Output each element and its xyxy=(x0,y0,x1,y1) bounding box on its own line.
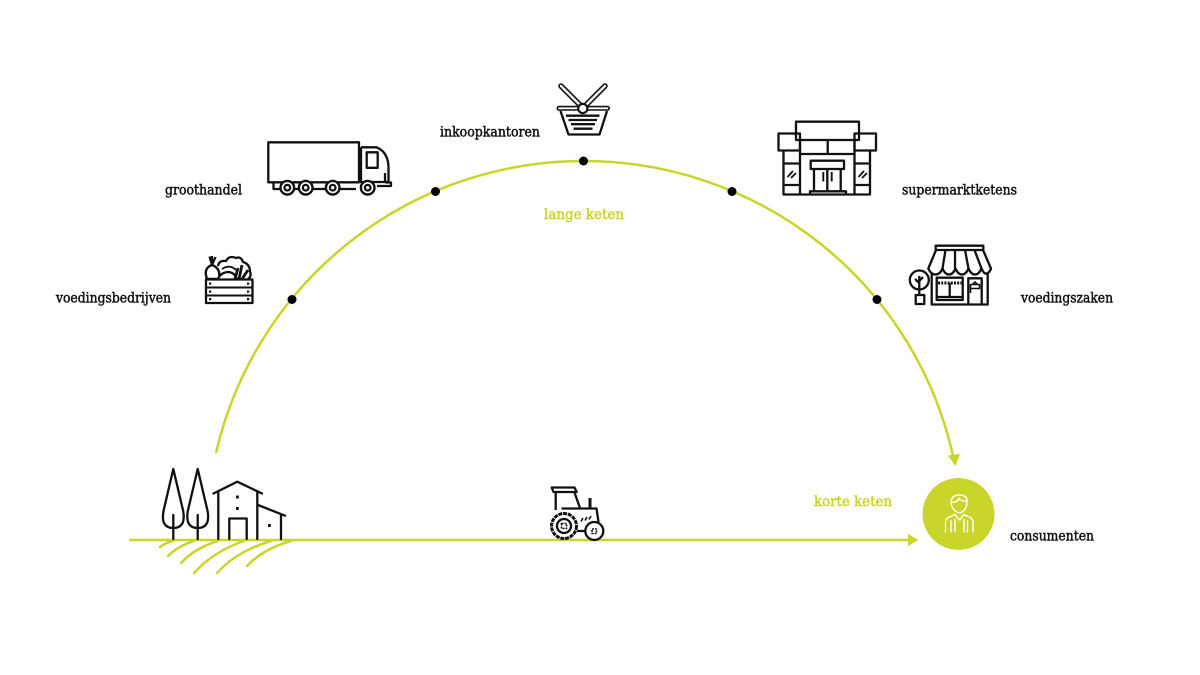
label: groothandel: groothandel xyxy=(165,182,242,198)
label: inkoopkantoren: inkoopkantoren xyxy=(440,124,540,140)
icon: shopping basket xyxy=(559,86,608,134)
icon: supermarket building xyxy=(778,122,876,194)
long chain arc arrow xyxy=(216,161,960,466)
label: lange keten: lange keten xyxy=(544,207,624,223)
label: voedingsbedrijven: voedingsbedrijven xyxy=(55,290,171,306)
label: voedingszaken: voedingszaken xyxy=(1020,290,1113,306)
field furrows xyxy=(160,541,291,573)
icon: farm with trees xyxy=(163,469,285,539)
icon: delivery truck xyxy=(268,142,391,194)
label: consumenten: consumenten xyxy=(1010,528,1094,544)
short chain arrow xyxy=(129,534,918,546)
consumer circle xyxy=(922,478,994,550)
chain stop dots xyxy=(288,156,882,304)
label: korte keten: korte keten xyxy=(814,494,892,510)
icon: consumer person xyxy=(946,495,973,532)
icon: food shop with tree xyxy=(910,246,991,304)
icon: vegetable crate xyxy=(206,256,252,303)
icon: tractor xyxy=(552,488,603,540)
label: supermarktketens: supermarktketens xyxy=(902,182,1017,198)
